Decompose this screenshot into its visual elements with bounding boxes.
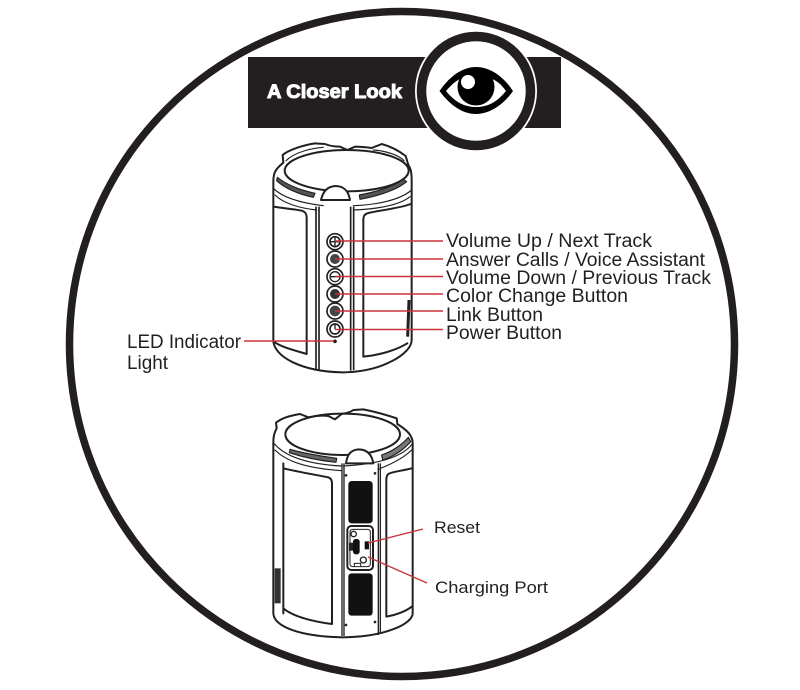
title text: A Closer Look <box>267 82 402 103</box>
front control buttons <box>327 234 343 343</box>
icon: eye in ring <box>415 30 537 152</box>
title banner <box>248 57 561 128</box>
label: charging port: Charging Port <box>435 578 548 597</box>
label: LED indicator: LED Indicator <box>127 332 242 353</box>
callout lines: rear <box>368 529 427 583</box>
callout lines: front <box>244 241 443 341</box>
label: color change: Color Change Button <box>446 286 628 307</box>
label: volume down: Volume Down / Previous Track <box>446 268 712 289</box>
speaker: front view <box>273 143 412 372</box>
label: power button: Power Button <box>446 323 562 344</box>
label: volume up: Volume Up / Next Track <box>446 231 653 252</box>
rear speaker vents and port panel <box>347 481 373 616</box>
label: answer calls: Answer Calls / Voice Assistant <box>446 250 706 271</box>
speaker: rear view <box>273 409 413 637</box>
label: reset: Reset <box>434 518 480 537</box>
label: link button: Link Button <box>446 305 543 326</box>
label: light: Light <box>127 353 169 374</box>
